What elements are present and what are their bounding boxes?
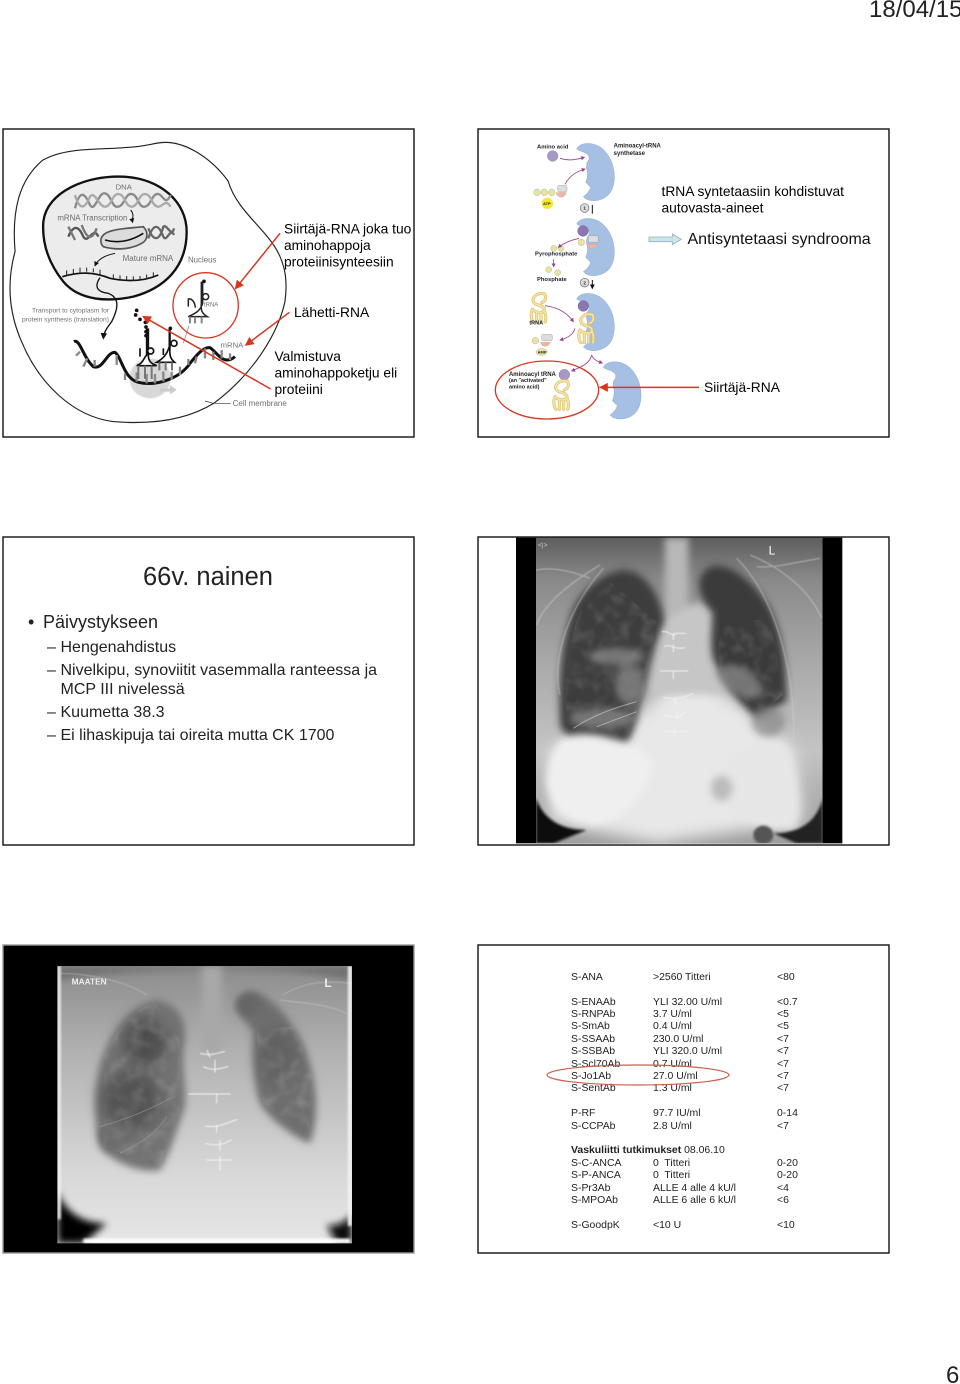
lab values: S-ANA: [571, 972, 603, 983]
lab values: <7: [777, 1083, 789, 1094]
lab values: 97.7 IU/ml: [653, 1108, 701, 1119]
text: siirtaja-RNA label: Siirtäjä-RNA: [704, 380, 781, 395]
lung mottling: [103, 1003, 313, 1167]
ATP group: [534, 185, 567, 209]
lab values: S-SmAb: [571, 1021, 610, 1032]
diagram labels: Mature mRNA: [123, 254, 174, 263]
diagram labels: Phosphate: [537, 277, 568, 283]
lab values: S-SentAb: [571, 1083, 616, 1094]
cell diagram: [12, 144, 289, 421]
panel: chest x-ray 1: [478, 537, 889, 845]
diagram labels: ATP: [543, 201, 551, 206]
lab values: <5: [777, 1009, 789, 1020]
lab values: S-MPOAb: [571, 1195, 618, 1206]
ribosome: [129, 358, 171, 398]
mediastinum: [200, 966, 224, 1012]
lab values: 1.3 U/ml: [653, 1083, 692, 1094]
sternal wires: [660, 631, 693, 738]
lung texture: [100, 1097, 173, 1153]
lab values: S-P-ANCA: [571, 1170, 621, 1181]
text: siirtaja-RNA callout: Siirtäjä-RNA joka tuo: [284, 222, 411, 236]
symptom list: Kuumetta 38.3: [60, 704, 165, 721]
symptom list: [47, 639, 377, 744]
diagram labels: Aminoacyl-tRNA: [614, 144, 662, 150]
x-ray image: <|>: [538, 542, 548, 549]
lab values: 2.8 U/ml: [653, 1121, 692, 1132]
symptom list: –: [47, 639, 56, 656]
mature mRNA strand: [62, 273, 158, 281]
lung mottling: [565, 582, 783, 738]
step markers: [580, 204, 589, 287]
symptom list: –: [47, 662, 56, 679]
diagram labels: Amino acid: [537, 144, 569, 150]
text: valmistuva callout: proteiini: [274, 382, 323, 397]
lung markings: [570, 648, 785, 737]
lab values: S-ENAAb: [571, 997, 616, 1008]
diagram labels: DNA: [116, 183, 133, 192]
diagram labels: mRNA: [221, 341, 244, 350]
lab values: S-RNPAb: [571, 1009, 616, 1020]
text: valmistuva callout: aminohappoketju eli: [274, 366, 397, 380]
panel: aminoacyl-tRNA synthesis: [478, 129, 889, 437]
text: tRNA autoantibodies: tRNA syntetaasiin kohdistuvat: [662, 184, 844, 199]
dark corners: [57, 1190, 107, 1243]
text: valmistuva callout: Valmistuva: [274, 349, 341, 364]
lab values: 0-20: [777, 1170, 798, 1181]
abdomen: [550, 681, 803, 843]
diagram labels: Pyrophosphate: [535, 252, 578, 258]
mRNA ribbon: [74, 341, 235, 383]
red ellipse and arrow: [495, 361, 599, 419]
diagram labels: synthetase: [614, 151, 646, 157]
diagram labels: 2: [583, 280, 586, 285]
diagram labels: amino acid): [509, 385, 540, 391]
symptom list: –: [47, 727, 56, 744]
left lung: [699, 566, 787, 718]
lab values: YLI 32.00 U/ml: [653, 997, 722, 1008]
lab values: S-GoodpK: [571, 1220, 620, 1231]
lab values: P-RF: [571, 1108, 595, 1119]
slide title: 66v. nainen: [143, 563, 273, 591]
lab values: 0.7 U/ml: [653, 1059, 692, 1070]
breast shadows: [544, 735, 610, 827]
pathway arrows: [545, 157, 602, 371]
lab values: <7: [777, 1121, 789, 1132]
bullet heading: •: [28, 612, 34, 632]
panel: chest x-ray 2: [3, 945, 414, 1253]
symptom list: Nivelkipu, synoviitit vasemmalla ranteessa ja: [60, 662, 377, 679]
lab values: 0.4 U/ml: [653, 1021, 692, 1032]
lab values: <7: [777, 1071, 789, 1082]
lab values: S-C-ANCA: [571, 1158, 621, 1169]
lab values: S-SSAAb: [571, 1034, 615, 1045]
lab values: <7: [777, 1034, 789, 1045]
lab values: <0.7: [777, 997, 798, 1008]
lab values: <80: [777, 972, 795, 983]
lab values: 0-14: [777, 1108, 798, 1119]
lab values: S-Jo1Ab: [571, 1071, 611, 1082]
lab values: <10: [777, 1220, 795, 1231]
diagram labels: (an "activated": [509, 378, 547, 384]
diagram labels: [509, 144, 662, 391]
lab values: 230.0 U/ml: [653, 1034, 703, 1045]
lab values: Vaskuliitti tutkimukset 08.06.10: [571, 1145, 725, 1156]
text: siirtaja-RNA callout: aminohappoja: [284, 238, 371, 253]
lab values: ALLE 6 alle 6 kU/l: [653, 1195, 736, 1206]
diagram labels: [22, 183, 287, 408]
DNA helix: [75, 193, 171, 208]
lab values: 0-20: [777, 1158, 798, 1169]
lab values: <7: [777, 1059, 789, 1070]
x-ray markers: MAATEN: [72, 977, 107, 987]
synthetase diagram: [495, 143, 699, 419]
symptom list: –: [47, 704, 56, 721]
diagram labels: AMP: [538, 350, 547, 355]
text: lahetti-RNA callout: Lähetti-RNA: [294, 305, 370, 320]
lab values: S-SSBAb: [571, 1046, 615, 1057]
panel: lab results table: [478, 945, 889, 1253]
bullet heading: Päivystykseen: [43, 612, 158, 632]
lab values: YLI 320.0 U/ml: [653, 1046, 722, 1057]
lab values: S-CCPAb: [571, 1121, 616, 1132]
tRNA shapes: [531, 294, 546, 322]
lab values: >2560 Titteri: [653, 972, 711, 983]
diagram labels: Transport to cytoplasm for: [32, 308, 110, 315]
lab values: 3.7 U/ml: [653, 1009, 692, 1020]
text: siirtaja-RNA callout: proteiinisynteesiin: [284, 254, 394, 270]
block arrow: [649, 234, 681, 245]
text: antisynthetase syndrome: Antisyntetaasi syndrooma: [688, 231, 871, 248]
diagram labels: Cell membrane: [233, 399, 287, 408]
amino acid chain: [134, 308, 172, 337]
lab values: 0 Titteri: [653, 1158, 690, 1169]
tRNA on ribosome: [137, 328, 177, 366]
lab values: S-Scl70Ab: [571, 1059, 621, 1070]
diagram labels: tRNA: [204, 302, 218, 308]
spine: [665, 538, 688, 638]
diagram labels: mRNA Transcription: [57, 214, 127, 223]
right lung: [559, 570, 664, 742]
lab values: S-Pr3Ab: [571, 1183, 611, 1194]
red ellipse highlighting S-Jo1Ab: [547, 1065, 729, 1085]
lab values: <7: [777, 1046, 789, 1057]
tRNA circled: [183, 282, 209, 343]
lab values: <10 U: [653, 1220, 681, 1231]
red highlight circle and arrows: [173, 273, 238, 338]
left image lung: [95, 1000, 185, 1171]
sternal wires: [188, 1050, 237, 1171]
lab values: [571, 972, 798, 1231]
symptom list: Hengenahdistus: [60, 639, 176, 656]
diagram labels: tRNA: [529, 320, 543, 326]
dark bottom corners: [536, 798, 587, 843]
lab values: 27.0 U/ml: [653, 1071, 698, 1082]
lab values: <4: [777, 1183, 789, 1194]
x-ray image: [57, 966, 352, 1243]
symptom list: Ei lihaskipuja tai oireita mutta CK 1700: [60, 727, 335, 744]
text: tRNA autoantibodies: autovasta-aineet: [662, 200, 764, 216]
symptom list: MCP III nivelessä: [60, 681, 185, 698]
diagram labels: 1: [583, 206, 586, 211]
lab values: <6: [777, 1195, 789, 1206]
diagram labels: protein synthesis (translation): [22, 317, 109, 324]
transcription helix: [68, 225, 174, 249]
diagram labels: Nucleus: [188, 256, 217, 265]
right image lung: [238, 991, 316, 1143]
panel: RNA translation cell diagram: [3, 129, 414, 437]
nucleus: [43, 177, 187, 299]
lab values: 0 Titteri: [653, 1170, 690, 1181]
lab values: <5: [777, 1021, 789, 1032]
diagram labels: Aminoacyl tRNA: [509, 372, 557, 378]
lab values: ALLE 4 alle 4 kU/l: [653, 1183, 736, 1194]
x-ray markers: L: [769, 543, 776, 557]
x-ray image: [516, 538, 842, 844]
panel: case description: [3, 537, 414, 845]
x-ray image: L: [324, 976, 332, 990]
